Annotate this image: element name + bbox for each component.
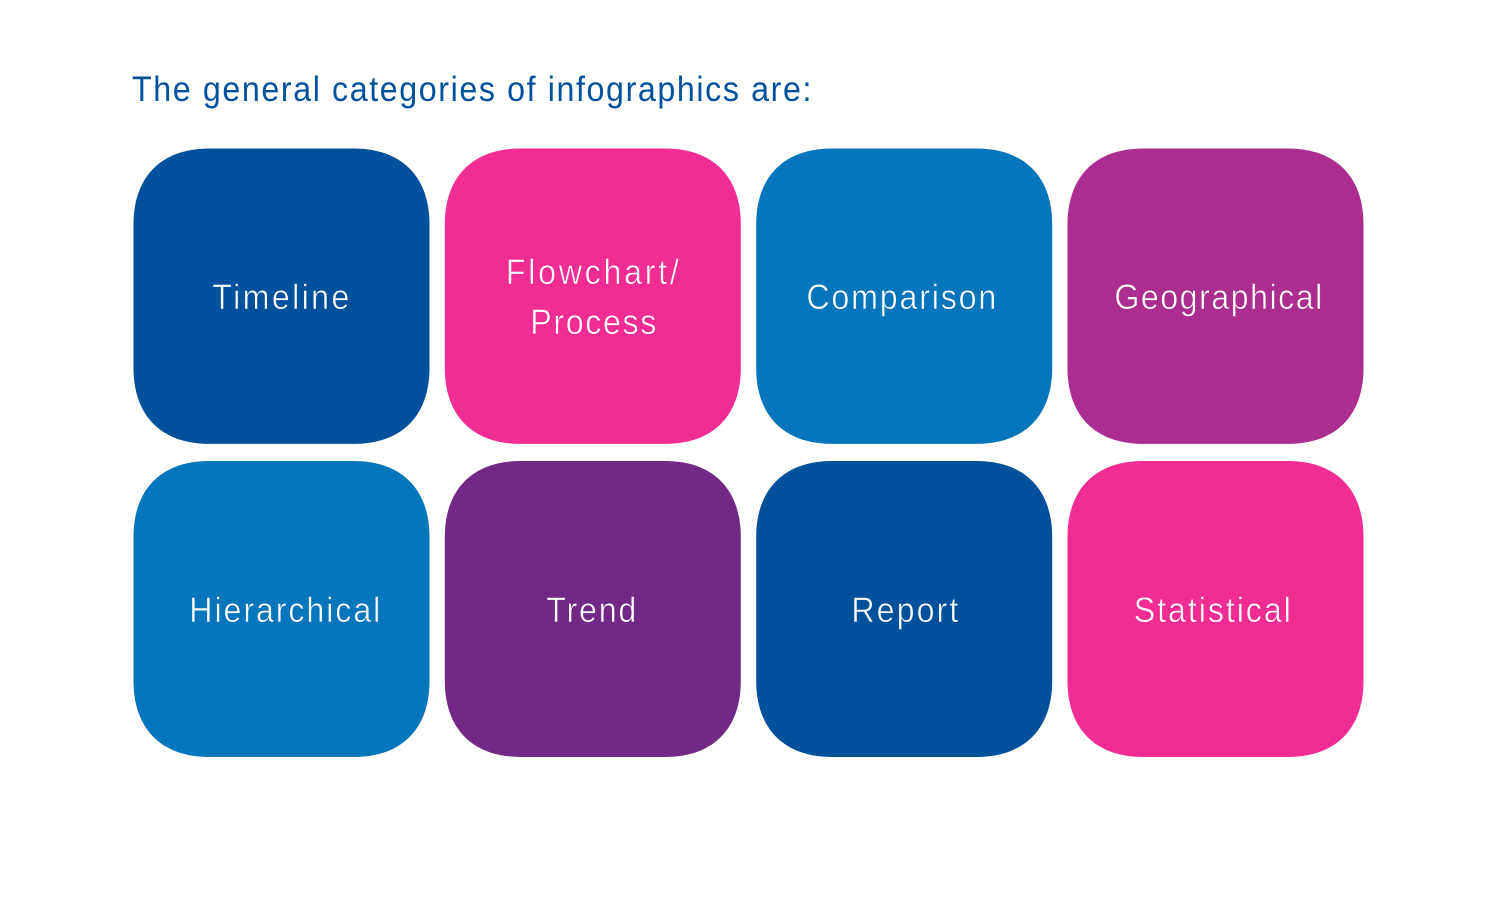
tile: Trend: Trend [546,592,636,630]
tile: Report: Report [851,592,959,630]
tile: Hierarchical [134,461,430,757]
tile: Report [756,461,1052,757]
tile: Comparison: Comparison [806,279,996,317]
tile: Geographical: Geographical [1114,279,1322,317]
tile: Flowchart/Process: Process [530,304,656,342]
tile: Timeline [134,148,430,444]
tile: Hierarchical: Hierarchical [189,592,380,630]
tile: Flowchart/Process [445,148,741,444]
title: The general categories of infographics are: [132,71,811,109]
tile: Timeline: Timeline [212,279,349,317]
tile: Trend [445,461,741,757]
tile: Statistical: Statistical [1134,592,1291,630]
tile: Geographical [1068,148,1364,444]
tile: Comparison [756,148,1052,444]
tile: Statistical [1068,461,1364,757]
tile: Flowchart/Process: Flowchart/ [506,254,679,292]
